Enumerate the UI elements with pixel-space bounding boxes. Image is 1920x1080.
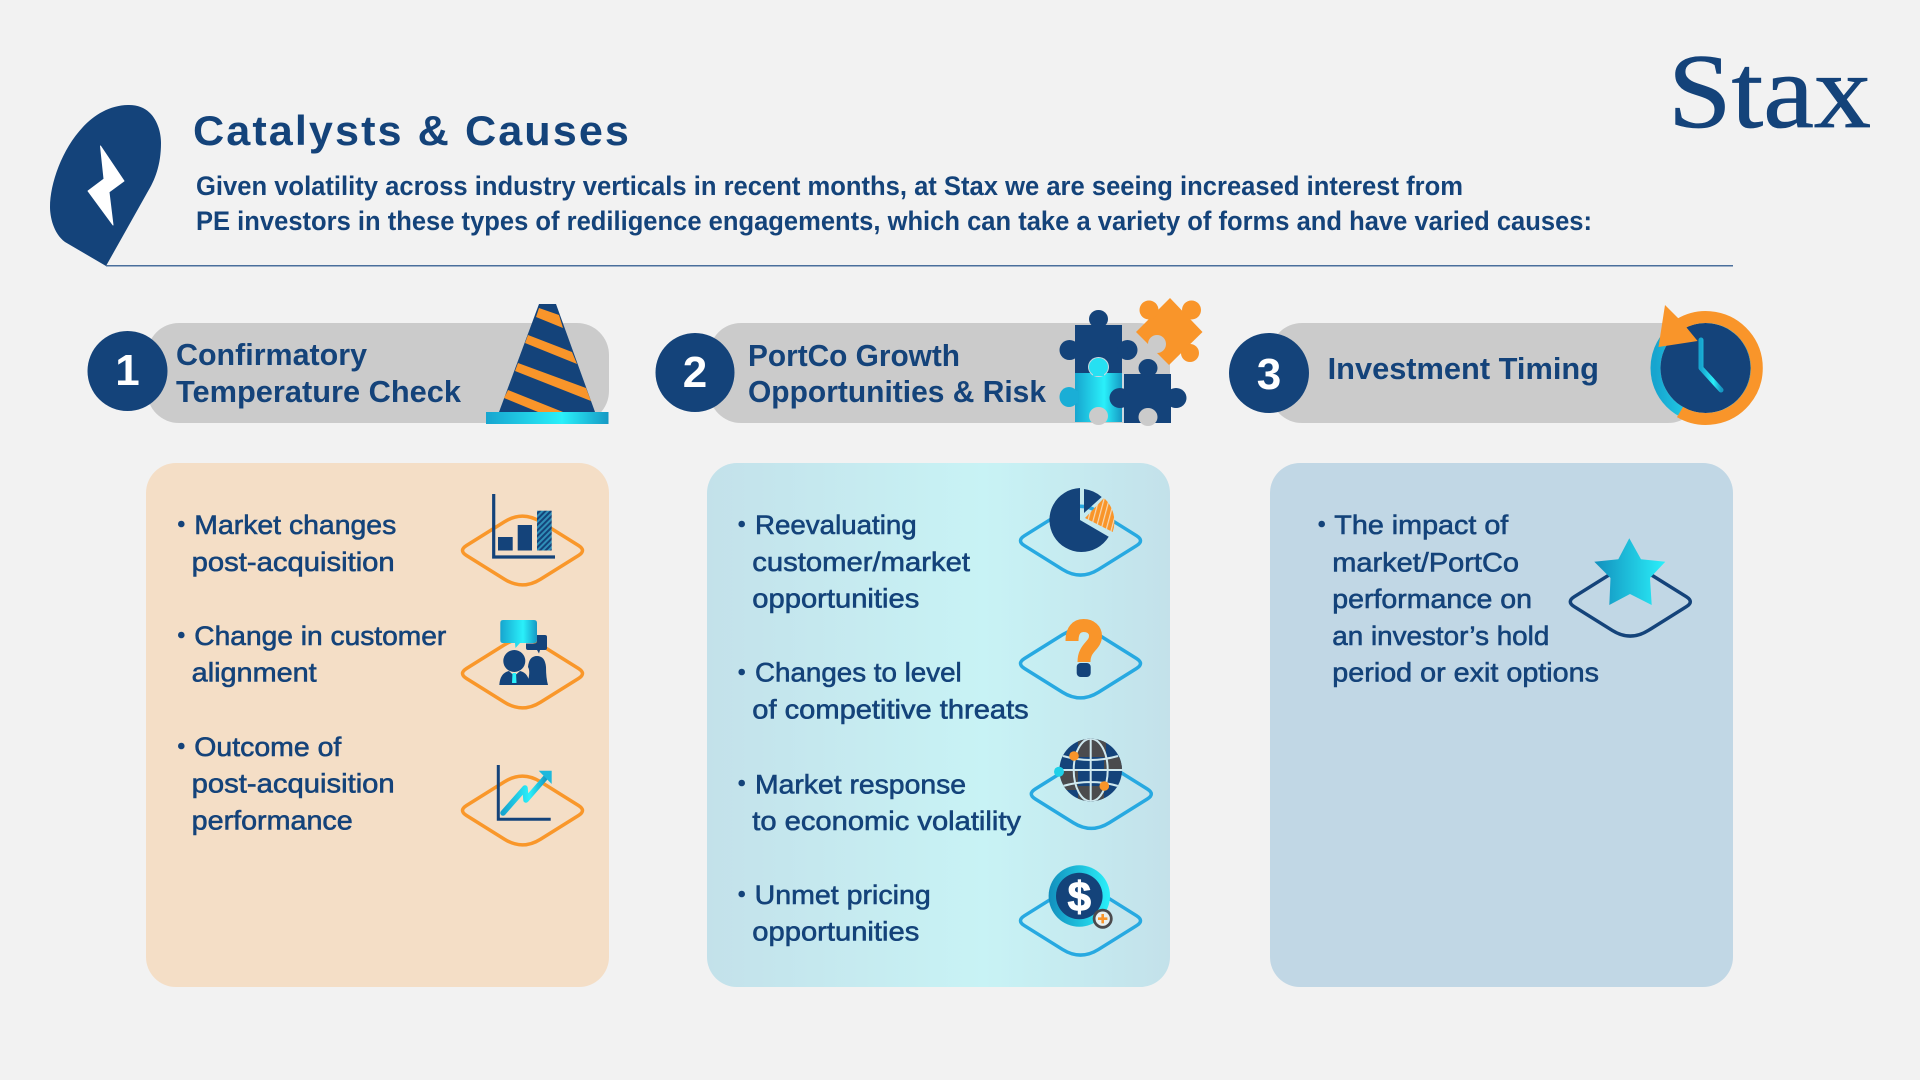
panel: confirmatory temperature check body [146,463,609,987]
icon: dollar coin: $ [1068,873,1091,920]
badge 1 [88,331,168,411]
heading 2: Opportunities & Risk [748,374,1047,409]
badge 3 [1229,333,1309,413]
icon: customer conversation [462,620,582,708]
bullet list: column 2: opportunities [752,917,919,947]
icon: lightning pin [50,105,161,266]
icon: puzzle pieces [1060,298,1202,426]
bullet list: column 2 [738,510,1029,947]
panel: investment timing body [1270,463,1733,987]
bullet list: column 2: customer/market [752,547,971,577]
bullet list: column 2: to economic volatility [752,806,1022,836]
bullet list: column 1: Change in customer [194,621,446,651]
heading 1: Confirmatory [176,337,368,372]
icon: clock with arrow [1656,305,1757,419]
header pill 1 [88,304,609,424]
icon: pie chart [1020,488,1140,575]
bullet list: column 3: performance on [1332,584,1532,614]
bullet list: column 3: period or exit options [1332,658,1599,688]
intro text [196,171,1592,236]
icon: question mark [1020,626,1140,698]
icon: traffic cone [486,304,608,424]
bullet list: column 1: post-acquisition [192,769,395,799]
header pill 2 [656,298,1202,426]
bullet list: column 1: Market changes [194,510,396,540]
badge 2: 2 [683,348,707,397]
intro text: Given volatility across industry verticals in recent months, at Stax we are seeing increased interest from [196,171,1463,201]
heading 2 [748,338,1047,409]
badge 3: 3 [1257,350,1281,399]
panel: portco growth body [707,463,1170,987]
heading 1: Temperature Check [176,374,462,409]
badge 1: 1 [115,346,140,395]
icon: globe [1031,735,1151,828]
bullet list: column 1: performance [192,806,353,836]
title: Catalysts & Causes [193,107,631,154]
bullet list: column 2: Reevaluating [755,510,917,540]
bullet list: column 2: of competitive threats [752,695,1029,725]
bullet list: column 2: opportunities [752,584,919,614]
bullet list: column 1: alignment [192,658,317,688]
bullet list: column 1: Outcome of [194,732,342,762]
bullet list: column 3: an investor’s hold [1332,621,1549,651]
bullet list: column 1: post-acquisition [192,547,395,577]
bullet list: column 3: The impact of [1334,510,1509,540]
header pill 3 [1229,305,1757,423]
heading 1 [176,337,462,409]
heading 2: PortCo Growth [748,338,960,373]
icon: star [1570,538,1690,636]
logo: Stax: Stax [1668,33,1871,150]
badge 2 [656,333,734,412]
bullet list: column 2: Market response [755,769,966,799]
bullet list: column 3 [1318,510,1599,688]
bullet list: column 3: market/PortCo [1332,548,1519,578]
intro text: PE investors in these types of rediligence engagements, which can take a variety of forms and have varied causes: [196,206,1592,236]
icon: dollar coin [1020,865,1140,955]
heading 3: Investment Timing [1328,351,1599,386]
bullet list: column 1 [178,510,446,836]
icon: bar chart [462,494,582,585]
icon: growth arrow chart [462,765,582,845]
bullet list: column 2: Unmet pricing [755,880,931,910]
bullet list: column 2: Changes to level [755,658,962,688]
